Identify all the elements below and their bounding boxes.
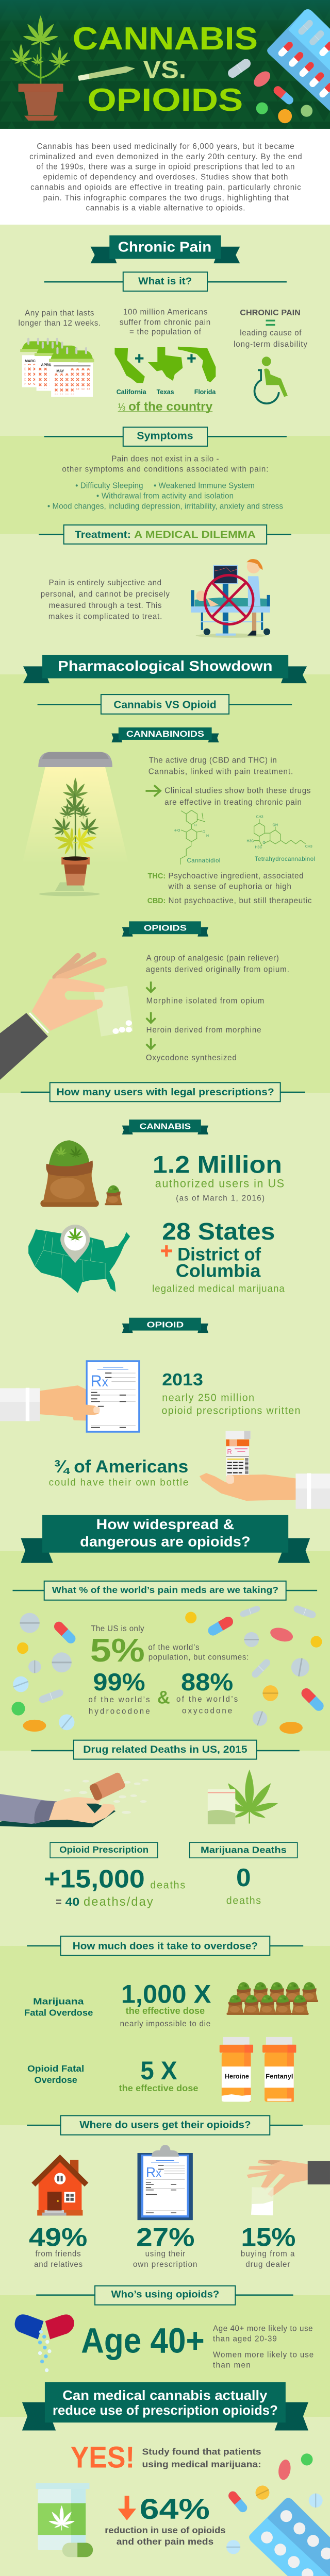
icon: hand with bag xyxy=(246,2160,330,2215)
stat: 15 percent xyxy=(241,2223,295,2269)
stat: opioid deaths: deaths xyxy=(150,1879,185,1891)
text: THC and CBD xyxy=(147,872,312,905)
icon: blister and pills xyxy=(226,2453,330,2576)
stat: marijuana deaths: 0 xyxy=(236,1864,251,1892)
ribbon: Cannabis: CANNABIS xyxy=(140,1123,191,1131)
stat: 49 percent xyxy=(29,2223,87,2269)
stat: 64 percent: reduction in use of opioids xyxy=(105,2525,226,2535)
heading: Treatment: Treatment: xyxy=(75,530,131,540)
heading: Cannabis VS Opioid: Cannabis VS Opioid xyxy=(113,699,217,711)
stat: 15 percent: buying from a xyxy=(241,2250,295,2259)
icon: wheelchair xyxy=(255,357,288,403)
stat: 2013 prescriptions: opioid prescriptions written xyxy=(161,1405,300,1417)
stat: 1000x: nearly impossible to die xyxy=(120,2020,210,2028)
arrow xyxy=(145,785,160,796)
icon: state maps xyxy=(114,347,216,383)
icon: overdose hand and spilled pills xyxy=(0,1772,148,1827)
text: marijuana fatal overdose: Marijuana xyxy=(33,1996,84,2006)
icon: many sacks xyxy=(226,1982,318,2015)
icon: bag and cannabis leaf xyxy=(208,1769,279,1824)
label: opioid prescription: Opioid Prescription xyxy=(59,1844,148,1855)
title: VS. xyxy=(143,56,186,83)
icon: hand holding prescription: x xyxy=(102,1376,109,1389)
icon: potted cannabis plant xyxy=(9,15,71,121)
title xyxy=(73,21,258,118)
stat: 49 percent: and relatives xyxy=(34,2260,82,2269)
text: population: suffer from chronic pain xyxy=(120,318,210,327)
icon: joint xyxy=(78,66,135,81)
stat: 49 percent: 49% xyxy=(29,2223,87,2251)
text: leading cause xyxy=(234,309,307,349)
text: pain subjective xyxy=(41,579,170,621)
text: one third of the country: ⅓ xyxy=(118,401,125,413)
icon: US map with pin xyxy=(28,1225,130,1293)
stat: authorized users: 1.2 Million xyxy=(153,1151,282,1179)
ribbon: Opioids: OPIOIDS xyxy=(144,924,187,933)
stat: five percent: of the world’s xyxy=(148,1643,200,1652)
ribbon: How widespread: How widespread & xyxy=(96,1516,234,1532)
text: population: 100 million Americans xyxy=(123,308,208,317)
ribbon: How widespread xyxy=(21,1515,310,1563)
labels: states xyxy=(117,388,216,396)
heading: Treatment: A MEDICAL DILEMMA xyxy=(134,530,256,540)
chart: cannabidiol molecule: H-O xyxy=(174,829,180,833)
stat: five percent: 5% xyxy=(90,1632,145,1669)
stat: oxycodone: 88% xyxy=(181,1669,233,1696)
text: yes xyxy=(71,2441,261,2475)
ribbon: Cannabis xyxy=(122,1120,208,1134)
stat: authorized users xyxy=(153,1151,284,1203)
icon: calendars xyxy=(20,338,94,397)
intro paragraph: of the 1990s, there was a surge in opioid prescriptions that led to an xyxy=(37,163,294,172)
icon: calendars: MAY xyxy=(56,370,64,374)
text: marijuana fatal overdose: Fatal Overdose xyxy=(24,2007,93,2018)
text: duration xyxy=(19,309,101,328)
heading: Cannabis VS Opioid xyxy=(38,694,292,714)
icon: blister pack and pills xyxy=(226,9,330,123)
icon: fentanyl bottle xyxy=(262,2037,296,2102)
text: clinical studies: are effective in treating chronic pain xyxy=(164,798,302,807)
stat: 27 percent: using their xyxy=(145,2250,185,2259)
stat: oxycodone xyxy=(176,1669,238,1715)
chart: cannabidiol molecule: H xyxy=(206,835,209,838)
stat: 64 percent: 64% xyxy=(140,2493,210,2525)
icon: calendars: APRIL xyxy=(41,363,52,367)
ribbon: Opioid: OPIOID xyxy=(146,1320,184,1329)
icon: plant under grow lamp xyxy=(22,752,129,896)
chart: THC molecule: H3C xyxy=(255,846,262,850)
stat: 27 percent xyxy=(133,2223,197,2269)
text: symptoms: • Difficulty Sleeping xyxy=(75,482,143,490)
heading: What is it xyxy=(44,272,287,291)
stat: marijuana deaths xyxy=(226,1864,261,1907)
ribbon: Cannabinoids xyxy=(111,727,219,742)
text: duration: Any pain that lasts xyxy=(25,309,94,317)
stat: 1000x xyxy=(120,1980,211,2028)
heading: who is using xyxy=(36,2286,293,2305)
intro paragraph: Cannabis has been used medicinally for 6,000 years, but it became xyxy=(37,142,294,151)
stat: Age 40+: Age 40+ xyxy=(81,2321,205,2361)
text: opioid fatal overdose: Overdose xyxy=(35,2075,77,2085)
icon: heroine bottle xyxy=(220,2037,253,2102)
chart: THC molecule: Tetrahydrocannabinol xyxy=(255,856,315,862)
chart: THC molecule: H3C xyxy=(246,839,254,843)
stat: 28 states: legalized medical marijuana xyxy=(152,1283,285,1295)
stat: authorized users: (as of March 1, 2016) xyxy=(176,1194,265,1203)
stat: 28 states: 28 States xyxy=(162,1218,275,1245)
stat: five percent: population, but consumes: xyxy=(148,1653,249,1662)
stat: opioid deaths: +15,000 xyxy=(44,1865,145,1893)
stat: hydrocodone: hydrocodone xyxy=(89,1707,150,1716)
text: opioids description: agents derived originally from opium. xyxy=(146,965,289,974)
stat: five percent: The US is only xyxy=(91,1624,144,1633)
stat: 15 percent: 15% xyxy=(241,2223,295,2251)
stat: five percent xyxy=(90,1624,249,1669)
heading: Symptoms: Symptoms xyxy=(137,430,193,442)
text: population xyxy=(120,308,210,336)
text: THC and CBD: with a sense of euphoria or high xyxy=(168,882,291,891)
stat: 64 percent: and other pain meds xyxy=(117,2536,213,2547)
chart: cannabidiol molecule: H xyxy=(194,823,197,827)
section: consumption and deaths xyxy=(0,1669,318,2028)
section: opioid prescriptions and danger xyxy=(0,1360,330,1734)
text: opioids description: A group of analgesic (pain reliever) xyxy=(146,954,279,963)
text: THC and CBD: Psychoactive ingredient, associated xyxy=(169,872,304,880)
chart: THC molecule: CH3 xyxy=(305,845,312,849)
stat: 28 states xyxy=(152,1218,285,1295)
text: age and gender: Women more likely to use xyxy=(213,2351,314,2360)
text: yes: YES! xyxy=(71,2441,135,2475)
stat: hydrocodone xyxy=(88,1669,150,1716)
label: marijuana deaths: Marijuana Deaths xyxy=(201,1844,287,1855)
stat: 1000x: the effective dose xyxy=(126,2006,205,2016)
text: pain subjective: personal, and cannot be precisely xyxy=(41,590,170,599)
stat: 49 percent: from friends xyxy=(36,2250,81,2259)
section: chronic pain xyxy=(19,235,307,349)
chart: THC molecule xyxy=(246,815,315,862)
text: opioid fatal overdose xyxy=(27,2063,84,2085)
section: chronic pain graphics and symptoms xyxy=(20,338,307,683)
header section xyxy=(0,0,330,129)
heading: What is it: What is it? xyxy=(138,276,192,287)
stat: oxycodone: oxycodone xyxy=(182,1706,232,1715)
text: population: = the population of xyxy=(129,328,202,336)
text: age and gender: than aged 20-39 xyxy=(213,2335,277,2344)
stat: authorized users: authorized users in US xyxy=(155,1177,284,1190)
ribbon: Can medical cannabis xyxy=(22,2382,308,2430)
ribbon: Cannabinoids: CANNABINOIDS xyxy=(126,730,204,739)
text: opioids description: Oxycodone synthesized xyxy=(146,1054,237,1062)
text: age and gender: than men xyxy=(213,2361,251,2370)
text: opioids description: Heroin derived from morphine xyxy=(146,1026,261,1035)
section: opioid overdose and sources xyxy=(15,2037,330,2372)
text: age and gender xyxy=(213,2325,314,2370)
stat: 2013 prescriptions xyxy=(161,1370,300,1417)
intro paragraph: criminalized and even demonized in the early 20th century. By the end xyxy=(29,152,302,161)
text: symptoms: • Weakened Immune System xyxy=(154,482,255,490)
icon: sacks of cannabis xyxy=(40,1140,122,1207)
heading: drug related deaths: Drug related Deaths in US, 2015 xyxy=(83,1744,248,1755)
text: cannabinoids description: Cannabis, linked with pain treatment. xyxy=(148,768,293,776)
text: age and gender: Age 40+ more likely to use xyxy=(213,2325,313,2333)
text: THC and CBD: THC: xyxy=(148,872,166,880)
stat: 64 percent xyxy=(105,2493,226,2547)
chart: cannabidiol molecule: O xyxy=(203,831,206,834)
text: one third of the country: of the country xyxy=(128,400,213,414)
text: pain subjective: Pain is entirely subjective and xyxy=(49,579,161,587)
icon: scattered pills xyxy=(11,1604,326,1734)
section: legal users xyxy=(21,1082,305,1333)
heading: legal prescriptions xyxy=(21,1082,305,1101)
icon: clipboard prescription: Rx xyxy=(146,2164,162,2180)
text: cannabinoids description: The active drug (CBD and THC) in xyxy=(149,756,277,765)
text: opioid fatal overdose: Opioid Fatal xyxy=(27,2063,84,2074)
text: THC and CBD: Not psychoactive, but still therapeutic xyxy=(169,896,312,905)
text: THC and CBD: CBD: xyxy=(147,897,166,905)
icon: hand holding prescription: R xyxy=(91,1372,102,1390)
icon: clipboard prescription xyxy=(138,2145,193,2220)
icon: hand holding pill bottle xyxy=(200,1431,330,1509)
title: OPIOIDS xyxy=(87,82,243,118)
stat: 5x: the effective dose xyxy=(119,2083,199,2093)
text: cannabinoids description xyxy=(148,756,293,776)
heading: what percent xyxy=(12,1581,317,1600)
icon: calendars: MARC xyxy=(25,360,36,363)
icon: open capsule with bubbles xyxy=(15,2314,74,2372)
chart: THC molecule: O xyxy=(262,841,266,845)
stat: three quarters xyxy=(49,1457,188,1488)
ampersand: & xyxy=(157,1687,170,1707)
title: CANNABIS xyxy=(73,21,258,57)
ribbon: Can medical cannabis: Can medical cannabis actually xyxy=(62,2388,268,2403)
text: yes: Study found that patients xyxy=(142,2446,261,2456)
heading: where do users get opioids xyxy=(27,2115,303,2135)
icon: medical cannabis bottle xyxy=(36,2483,93,2557)
heading: drug related deaths xyxy=(31,1740,300,1759)
stat: opioid deaths: deaths/day xyxy=(84,1895,153,1909)
text: symptoms: • Mood changes, including depression, irritability, anxiety and stress xyxy=(47,502,283,511)
stat: oxycodone: of the world’s xyxy=(176,1695,238,1704)
text: yes: using medical marijuana: xyxy=(142,2459,261,2469)
stat: hydrocodone: of the world’s xyxy=(88,1696,150,1704)
stat: 15 percent: drug dealer xyxy=(245,2260,290,2269)
stat: 28 states: District of xyxy=(177,1244,261,1265)
intro paragraph: pain. This infographic compares the two drugs, highlighting that xyxy=(43,194,289,202)
stat: marijuana deaths: deaths xyxy=(226,1895,261,1907)
icon: hand holding prescription xyxy=(0,1360,140,1433)
text: pain subjective: makes it complicated to treat. xyxy=(48,613,162,621)
section: cannabis vs opioid xyxy=(0,694,315,1080)
stat: three quarters: could have their own bottle xyxy=(49,1477,188,1488)
text: leading cause: CHRONIC PAIN xyxy=(240,309,301,317)
icon: heroine bottle: Heroine xyxy=(225,2073,249,2080)
intro paragraph: cannabis and opioids are effective in treating pain, particularly chronic xyxy=(30,183,301,192)
ribbon: How widespread: dangerous are opioids? xyxy=(80,1533,251,1549)
text: pain subjective: measured through a test. This xyxy=(49,601,162,610)
text: clinical studies: Clinical studies show both these drugs xyxy=(164,787,311,795)
text: leading cause: long-term disability xyxy=(234,340,307,349)
section: can cannabis reduce opioids xyxy=(15,2382,330,2576)
heading: who is using: Who’s using opioids? xyxy=(111,2290,219,2300)
stat: 2013 prescriptions: nearly 250 million xyxy=(162,1392,254,1403)
chart: cannabidiol molecule: Cannabidiol xyxy=(187,858,220,864)
chart: THC molecule: CH3 xyxy=(256,815,263,819)
text: opioids description: Morphine isolated from opium xyxy=(146,996,264,1006)
stat: opioid deaths xyxy=(44,1865,185,1909)
icon: patient in hospital bed with prohibition sign xyxy=(191,559,270,638)
intro paragraph: cannabis is a viable alternative to opioids. xyxy=(86,204,245,213)
ribbon: Can medical cannabis: reduce use of prescription opioids? xyxy=(53,2403,278,2418)
label: opioid prescription xyxy=(50,1842,158,1858)
stat: 28 states: Columbia xyxy=(176,1261,261,1281)
intro paragraph: epidemic of dependency and overdoses. Studies show that both xyxy=(43,173,288,182)
stat: hydrocodone: 99% xyxy=(93,1669,145,1696)
text: leading cause: leading cause of xyxy=(240,329,302,337)
heading: Symptoms xyxy=(44,427,287,446)
stat: 2013 prescriptions: 2013 xyxy=(162,1370,203,1389)
icon: hand holding pill bottle: R xyxy=(227,1448,232,1455)
ribbon: Chronic Pain: Chronic Pain xyxy=(118,239,211,255)
ribbon: Pharmacological Showdown: Pharmacological Showdown xyxy=(58,658,273,674)
stat: 1000x: 1,000 X xyxy=(121,1980,211,2009)
ribbon: Pharmacological Showdown xyxy=(23,655,307,683)
stat: 5x: 5 X xyxy=(140,2057,177,2085)
heading: what percent: What % of the world’s pain meds are we taking? xyxy=(52,1585,278,1595)
heading: Treatment xyxy=(39,525,291,544)
text: marijuana fatal overdose xyxy=(24,1996,93,2018)
labels: states: Texas xyxy=(157,388,174,396)
text: duration: longer than 12 weeks. xyxy=(19,319,101,328)
icon: house xyxy=(31,2155,88,2215)
icon: fentanyl bottle: Fentanyl xyxy=(266,2073,293,2080)
heading: legal prescriptions: How many users with legal prescriptions? xyxy=(56,1087,274,1098)
stat: opioid deaths: = xyxy=(56,1895,62,1908)
text: symptoms: other symptoms and conditions associated with pain: xyxy=(62,465,268,473)
text: symptoms xyxy=(47,454,283,511)
stat: 27 percent: 27% xyxy=(136,2223,195,2251)
label: marijuana deaths xyxy=(190,1842,298,1858)
stat: opioid deaths: 40 xyxy=(65,1895,79,1908)
labels: states: California xyxy=(117,388,146,396)
chart: THC molecule: OH xyxy=(273,823,278,827)
ribbon: Opioid xyxy=(122,1318,208,1333)
heading: overdose: How much does it take to overdose? xyxy=(73,1941,258,1952)
icon: hand holding bag of pills xyxy=(0,955,133,1080)
stat: 5x xyxy=(119,2057,199,2093)
stat: three quarters: ¾ of Americans xyxy=(54,1457,188,1477)
text: symptoms: • Withdrawal from activity and isolation xyxy=(96,492,234,501)
heading: where do users get opioids: Where do users get their opioids? xyxy=(79,2120,251,2131)
ribbon: Opioids xyxy=(122,921,208,937)
intro paragraph xyxy=(29,142,302,213)
text: clinical studies xyxy=(164,787,311,807)
text: symptoms: Pain does not exist in a silo - xyxy=(111,454,219,463)
stat: 27 percent: own prescription xyxy=(133,2260,197,2269)
chart: cannabidiol molecule xyxy=(174,810,220,865)
text: opioids description xyxy=(146,954,289,1062)
ribbon: Chronic Pain xyxy=(91,235,240,263)
heading: overdose xyxy=(27,1936,303,1956)
labels: states: Florida xyxy=(194,388,216,396)
